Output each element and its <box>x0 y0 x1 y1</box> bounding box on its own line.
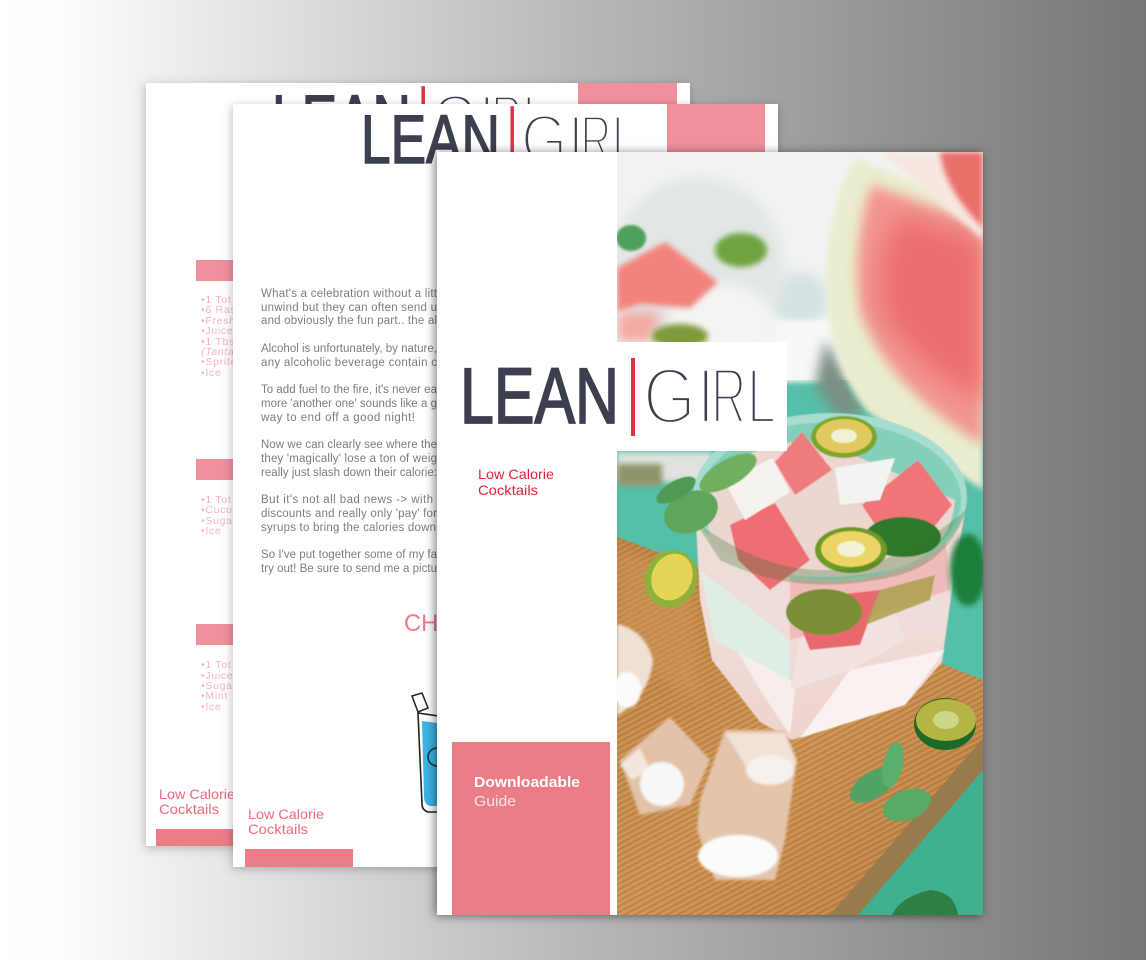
main cocktail glass <box>693 413 967 740</box>
watermelon cubes <box>730 503 810 590</box>
page 1 footer title <box>160 789 233 814</box>
intro body copy: they 'magically' lose a ton of weig <box>261 453 437 465</box>
mint leaves on board <box>850 742 931 822</box>
page 1 logo <box>276 86 530 104</box>
cover logo: R <box>711 352 746 440</box>
intro body copy: discounts and really only 'pay' for <box>261 508 437 520</box>
intro body copy: try out! Be sure to send me a pictu <box>261 563 437 575</box>
ingredient list 2 <box>201 496 232 534</box>
blurred watermelon slices <box>826 152 983 490</box>
glass body <box>695 505 966 740</box>
mint sprig on glass <box>656 452 758 534</box>
intro body copy: So I've put together some of my fa <box>261 549 438 561</box>
intro body copy: syrups to bring the calories down <box>261 522 436 534</box>
ingredient list 3: •Sugar F <box>201 680 248 692</box>
page 2 footer title: Cocktails <box>248 821 308 837</box>
intro body copy <box>260 288 438 575</box>
dark mint bottom <box>892 890 958 915</box>
cheers heading: CHE <box>404 610 454 637</box>
ingredient list 1: •Fresh M <box>201 315 249 327</box>
downloadable guide label: Guide <box>474 793 516 810</box>
ice and bubbles <box>725 458 790 520</box>
page 2 logo: G <box>521 101 567 178</box>
page 2 footer title <box>248 809 324 834</box>
ingredient list 1: •Juice o <box>201 325 244 337</box>
page 2 logo: I <box>568 101 583 178</box>
intro body copy: What's a celebration without a litt <box>261 288 438 300</box>
cover subtitle <box>478 466 554 498</box>
whole lime right <box>950 534 986 606</box>
cover logo: I <box>697 352 715 441</box>
intro body copy: any alcoholic beverage contain c <box>261 357 437 369</box>
lime half left <box>644 550 698 608</box>
downloadable guide label: Downloadable <box>474 774 580 791</box>
ingredient list 2: •Sugar F <box>201 515 248 527</box>
intro body copy: Alcohol is unfortunately, by nature, <box>261 343 437 355</box>
intro body copy: Now we can clearly see where the <box>261 439 437 451</box>
left ice chunk <box>613 624 653 716</box>
downloadable guide label <box>474 774 580 810</box>
cover pink block <box>452 742 610 915</box>
page 2 footer title: Low Calorie <box>248 806 324 822</box>
logo white panel <box>437 342 787 451</box>
blurred background glass <box>617 178 783 342</box>
ingredient list 3 <box>201 661 232 710</box>
cover logo: G <box>643 351 696 440</box>
page 1 logo: G <box>432 81 478 158</box>
icon: blue cocktail glass <box>411 692 437 813</box>
page 1 pink corner block <box>578 83 677 105</box>
ingredient list 1: •Sprite Z <box>201 356 248 368</box>
ingredient list 2: •Cucumb <box>201 504 249 516</box>
intro body copy: To add fuel to the fire, it's never ea <box>261 384 438 396</box>
ice cubes on board <box>620 717 797 880</box>
page 1 footer block <box>156 829 233 846</box>
intro body copy: really just slash down their calorie: <box>261 467 437 479</box>
page 3: front cover <box>437 152 986 915</box>
intro body copy: way to end off a good night! <box>260 412 415 424</box>
cover logo: LEAN <box>460 351 619 440</box>
ingredient list 1: •1 Tbsp <box>201 336 242 348</box>
ingredient list 3: •Juice 1 <box>201 670 244 682</box>
page 1 logo: I <box>479 81 494 158</box>
ingredient list 2: •Ice <box>201 525 221 537</box>
cover logo <box>460 351 776 441</box>
page 2 footer block <box>245 849 353 867</box>
lime slices in glass <box>811 416 877 458</box>
recipe heading bar 1 <box>196 260 233 281</box>
ingredient list 1: •6 Raspb <box>201 304 249 316</box>
cover subtitle: Cocktails <box>478 482 538 498</box>
page 1: back recipe page <box>146 80 690 846</box>
glass rim and drink <box>693 413 967 581</box>
cover subtitle: Low Calorie <box>478 466 554 482</box>
ingredient list 3: •1 Tot V <box>201 659 243 671</box>
ingredient list 1: •1 Tot C <box>201 294 243 306</box>
page 1 logo: L <box>523 82 548 158</box>
photo backdrop <box>617 152 906 342</box>
ingredient list 1 <box>201 296 233 376</box>
page 2 pink corner block <box>667 104 765 152</box>
page 1 logo: R <box>491 82 522 159</box>
recipe heading bar 3 <box>196 624 233 645</box>
cover photo: cocktail with watermelon and limes <box>612 152 986 915</box>
page 2 logo <box>364 106 619 164</box>
mockup scene: three stacked document pages <box>140 80 986 923</box>
cover logo: L <box>747 352 776 441</box>
wooden board <box>617 537 983 915</box>
cut lime on board <box>914 698 976 750</box>
ingredient list 3: •Ice <box>201 701 221 713</box>
page 1 footer title: Low Calorie <box>159 786 235 802</box>
intro body copy: But it's not all bad news -> with <box>261 494 433 506</box>
ingredient list 2: •1 Tot C <box>201 494 243 506</box>
intro body copy: and obviously the fun part.. the al <box>261 315 437 327</box>
ingredient list 1: •Ice <box>201 367 221 379</box>
page 1 footer title: Cocktails <box>159 801 219 817</box>
page 1 logo: LEAN <box>272 80 411 158</box>
ingredient list 1: (Tantali <box>201 346 241 358</box>
page 2: intro text page <box>233 100 778 867</box>
page 2 logo: L <box>612 102 637 178</box>
intro body copy: more 'another one' sounds like a g <box>261 398 437 410</box>
page 2 logo: R <box>580 102 611 179</box>
intro body copy: unwind but they can often send u <box>261 302 437 314</box>
recipe heading bar 2 <box>196 459 233 480</box>
page 2 logo: LEAN <box>361 100 500 178</box>
ingredient list 3: •Mint <box>201 690 228 702</box>
